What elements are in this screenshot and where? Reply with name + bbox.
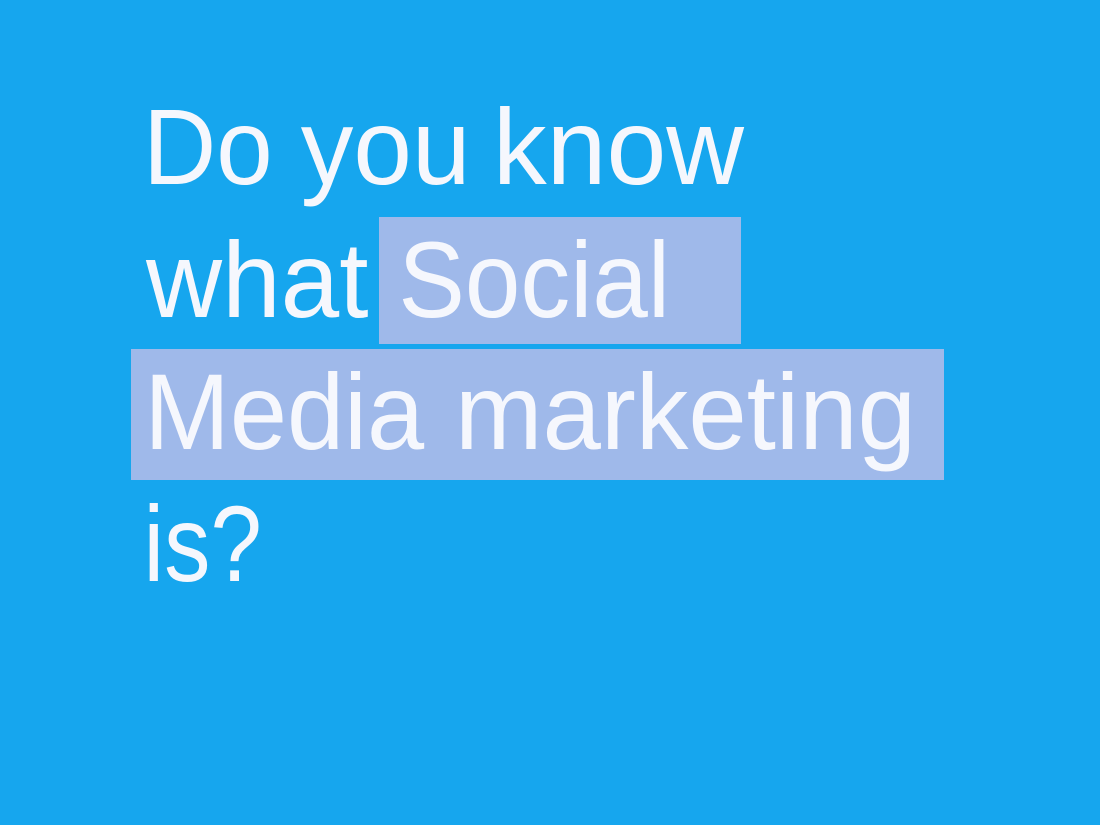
title line 2: Social <box>398 219 670 340</box>
highlight: Media marketing <box>131 349 944 480</box>
title line 3: Media <box>144 351 425 472</box>
title line 2: what <box>145 219 368 340</box>
title line 3 <box>144 351 916 472</box>
title <box>143 86 916 604</box>
title line 1: know <box>493 86 745 207</box>
title line 1: you <box>301 86 470 207</box>
title line 1: Do <box>143 86 273 207</box>
highlight: Social <box>379 217 741 344</box>
title line 1 <box>143 86 745 207</box>
title line 4: is? <box>144 483 262 604</box>
title line 2 <box>145 219 670 340</box>
title line 3: marketing <box>455 351 916 472</box>
